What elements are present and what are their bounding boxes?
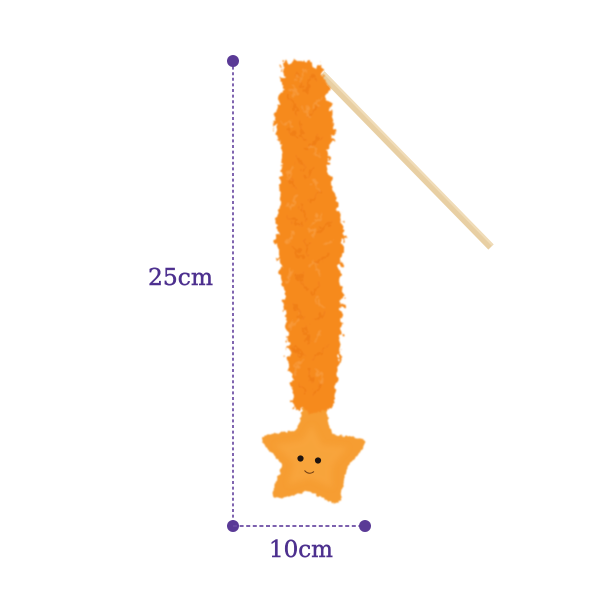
star plush toy xyxy=(262,405,365,503)
left eye xyxy=(297,455,304,462)
height dimension line xyxy=(227,55,239,532)
label: height 25cm: 25cm xyxy=(148,265,213,291)
feather highlights xyxy=(282,70,334,380)
star shading xyxy=(275,425,348,488)
feather boa xyxy=(272,60,345,413)
smile xyxy=(304,470,314,473)
width dimension line xyxy=(233,520,371,532)
feather texture xyxy=(286,72,332,394)
right eye xyxy=(315,457,321,464)
star body xyxy=(262,405,365,503)
wooden stick xyxy=(322,72,492,247)
label: width 10cm: 10cm xyxy=(269,537,333,563)
